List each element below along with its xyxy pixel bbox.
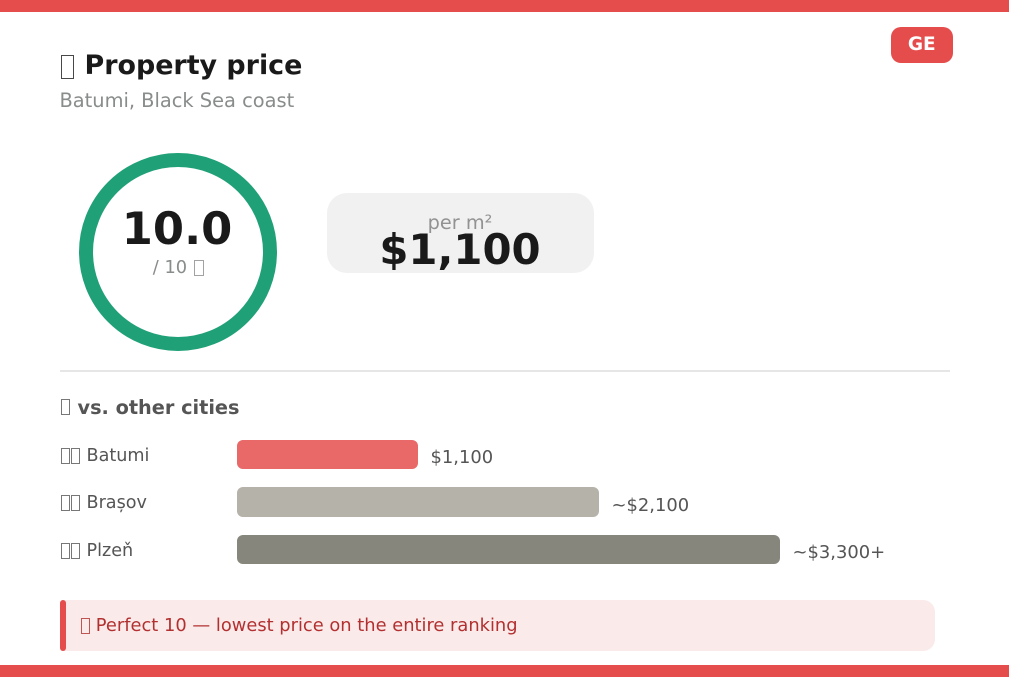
value: ~$2,100 (612, 495, 689, 516)
icon: missing glyph box (60, 55, 74, 79)
bar (237, 440, 418, 469)
city label: Batumi (86, 446, 149, 466)
heading text: vs. other cities (78, 396, 240, 418)
city label: Plzeň (86, 540, 133, 560)
flag placeholder (61, 495, 80, 511)
bar (237, 534, 780, 564)
score ring (79, 153, 277, 351)
country badge: GE (908, 34, 936, 54)
value: $1,100 (430, 447, 493, 468)
ring circle (78, 153, 276, 351)
price card (326, 193, 594, 273)
price value: $1,100 (379, 225, 541, 274)
divider (60, 370, 950, 372)
country badge (890, 26, 953, 62)
score scale: / 10 (153, 257, 187, 278)
icon: missing glyph box (60, 399, 70, 415)
row: Batumi (61, 440, 493, 469)
price unit: per m² (428, 211, 492, 234)
city label: Brașov (86, 493, 147, 513)
row: Plzen (61, 535, 885, 564)
top accent bar (0, 0, 1009, 12)
comparison heading (61, 396, 240, 418)
title (61, 50, 302, 81)
title text: Property price (84, 50, 302, 81)
subtitle: Batumi, Black Sea coast (60, 89, 294, 112)
value: ~$3,300+ (792, 542, 885, 563)
callout (60, 600, 935, 650)
icon: missing glyph box (80, 618, 90, 634)
bar (237, 487, 599, 517)
callout text: Perfect 10 — lowest price on the entire ranking (96, 614, 518, 636)
row: Brasov (61, 487, 689, 517)
score value: 10.0 (122, 202, 232, 255)
icon: missing glyph box (194, 260, 204, 276)
bottom accent bar (0, 665, 1009, 677)
callout accent (60, 600, 66, 650)
flag placeholder (61, 448, 80, 464)
flag placeholder (61, 543, 80, 559)
